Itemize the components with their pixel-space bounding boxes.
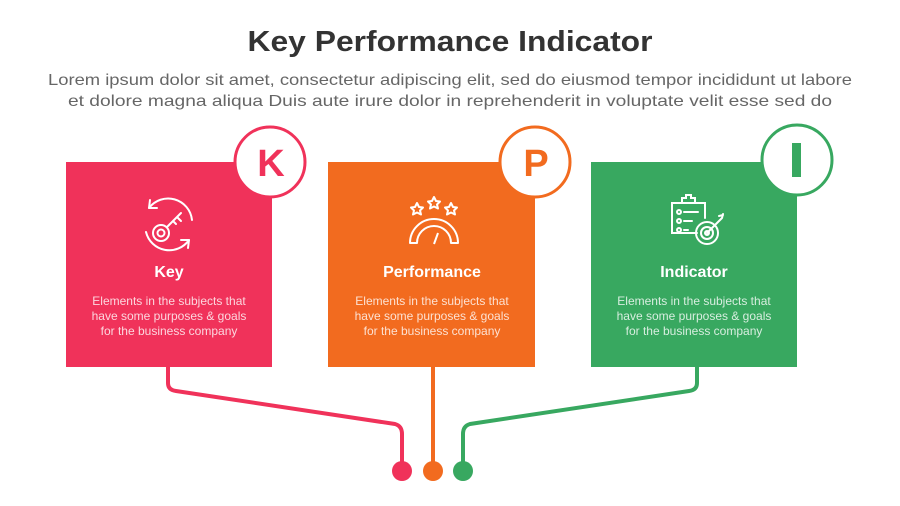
badge: K: K	[257, 143, 285, 185]
heading: Performance: Performance	[383, 264, 481, 281]
badge: I	[762, 125, 832, 195]
badge: P	[500, 127, 570, 197]
dots	[392, 461, 473, 481]
text block: have some purposes & goals	[92, 309, 246, 323]
text block: Elements in the subjects that	[92, 294, 246, 308]
subtitle	[48, 72, 852, 110]
icon: clipboard target	[672, 195, 723, 244]
title: Key Performance Indicator	[248, 26, 652, 58]
text block: for the business company	[626, 324, 762, 338]
subtitle: Lorem ipsum dolor sit amet, consectetur adipiscing elit, sed do eiusmod tempor incididunt ut labore	[48, 72, 852, 89]
text block: have some purposes & goals	[617, 309, 771, 323]
icon: gauge	[410, 197, 458, 244]
text block: Elements in the subjects that	[355, 294, 509, 308]
text block	[617, 294, 771, 338]
panel: key	[66, 162, 272, 367]
text block	[355, 294, 509, 338]
panel: performance	[328, 162, 535, 367]
text block: have some purposes & goals	[355, 309, 509, 323]
connector lines	[168, 366, 697, 466]
text block: for the business company	[101, 324, 237, 338]
text block	[92, 294, 246, 338]
badge: K	[235, 127, 305, 197]
subtitle: et dolore magna aliqua Duis aute irure dolor in reprehenderit in voluptate velit esse sed do	[68, 93, 832, 110]
panel: indicator	[591, 162, 797, 367]
text block: for the business company	[364, 324, 500, 338]
badge: P: P	[523, 143, 549, 185]
text block: Elements in the subjects that	[617, 294, 771, 308]
heading: Key: Key	[154, 264, 184, 281]
icon: key	[146, 198, 192, 250]
heading: Indicator: Indicator	[660, 264, 728, 281]
